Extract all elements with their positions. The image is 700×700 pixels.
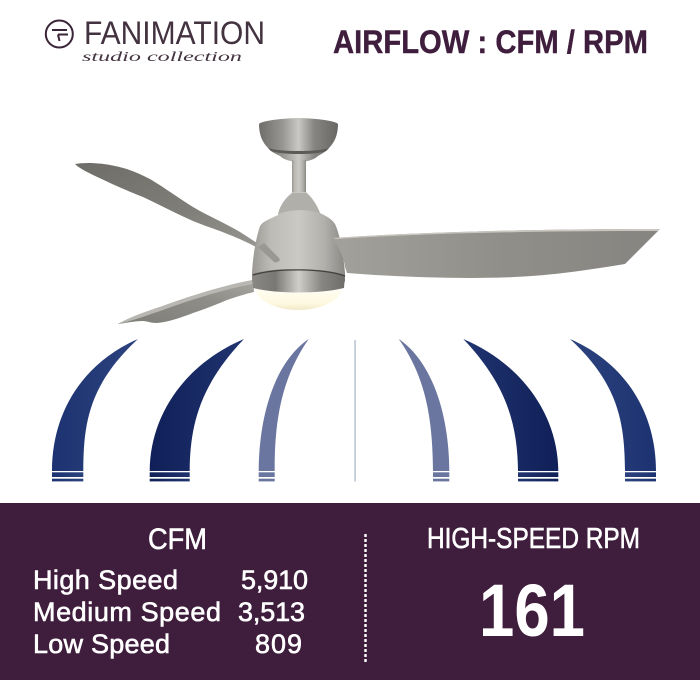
title: AIRFLOW : CFM / RPM [333, 24, 648, 60]
panel background [0, 503, 700, 680]
row: high speed: 5,910 [241, 565, 308, 595]
row: medium speed: 3,513 [238, 597, 305, 627]
airflow swoosh 3 [259, 339, 309, 481]
row: medium speed: Medium Speed [33, 597, 221, 627]
row: low speed: 809 [255, 629, 302, 659]
trim dark line [253, 270, 345, 276]
light trim band [252, 269, 345, 292]
canopy mount [259, 118, 338, 162]
airflow swoosh 2 [150, 339, 244, 481]
motor housing [252, 192, 345, 282]
housing shoulder [278, 193, 320, 214]
row: low speed: Low Speed [33, 629, 170, 659]
LED light [255, 289, 342, 310]
canopy ring [268, 148, 329, 154]
downrod [292, 160, 306, 193]
airflow swoosh 7 [570, 339, 656, 481]
brand name: FANIMATION [84, 15, 265, 51]
airflow line 4 [354, 340, 356, 482]
fan blade: lower [118, 280, 254, 324]
blade top edge highlight [333, 229, 660, 239]
airflow swoosh 6 [463, 339, 558, 481]
airflow graphic [52, 339, 656, 482]
dotted divider [364, 534, 367, 664]
lower blade highlight [118, 280, 253, 324]
row: medium speed [33, 597, 305, 627]
airflow swoosh 5 [399, 339, 449, 481]
script tagline: studio collection [82, 50, 242, 65]
CFM heading: CFM [148, 523, 207, 556]
RPM value: 161 [479, 569, 585, 652]
airflow swoosh 1 [52, 339, 138, 481]
icon: logo circle [46, 20, 73, 48]
row: low speed [33, 629, 302, 659]
fan blade: right [333, 229, 660, 278]
logo: Fanimation studio collection [46, 15, 265, 65]
row: high speed [33, 565, 308, 595]
CFM column [33, 523, 308, 659]
blade arm over housing [258, 243, 280, 262]
ceiling fan illustration [75, 118, 660, 324]
fan blade: left upper [75, 163, 280, 262]
row: high speed: High Speed [33, 565, 178, 595]
panel: specifications [0, 503, 700, 680]
RPM heading: HIGH-SPEED RPM [427, 523, 640, 555]
